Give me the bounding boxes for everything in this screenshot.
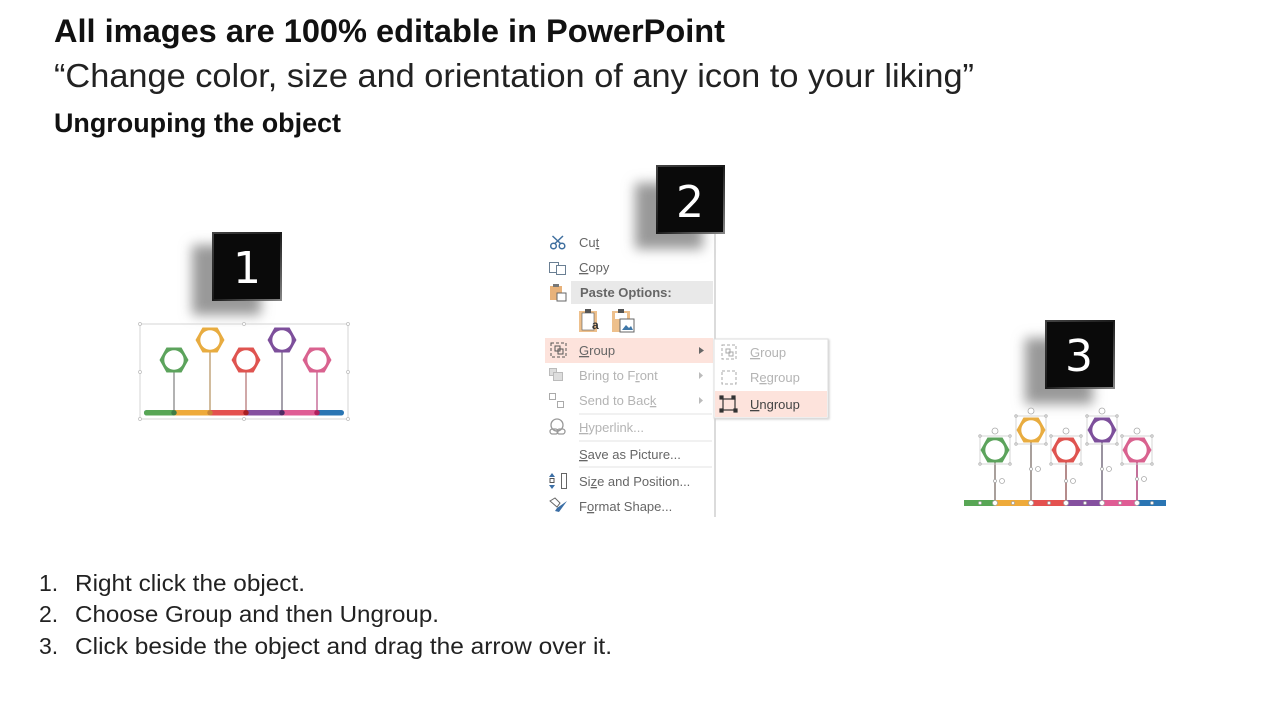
menu item: cut: Cut [579,235,600,250]
menu item: send to back: Send to Back [579,393,657,408]
step 2 badge [635,165,725,249]
icon: format shape [550,498,567,512]
paste options row [571,281,713,304]
highlighted row: group [545,338,713,363]
icon: group [551,343,566,357]
subtitle: “Change color, size and orientation of any icon to your liking” [54,57,974,94]
icon: paste picture [612,309,634,332]
icon: ungroup [720,396,737,412]
step 1 text: 1. [39,570,58,596]
menu item: size and position: Size and Position... [579,474,690,489]
step 2 text: Choose Group and then Ungroup. [75,601,439,627]
step 3 badge: 3 [1065,331,1093,382]
step 2 badge: 2 [676,177,704,228]
menu item: save as picture: Save as Picture... [579,447,681,462]
step 3 badge [1025,320,1115,404]
step 1 text: Right click the object. [75,570,305,596]
menu item: copy: Copy [579,260,610,275]
arrow: group submenu [699,347,704,354]
step 2 text: 2. [39,601,58,627]
step 3 ungrouped timeline graphic [964,408,1166,506]
menu heading: paste options: Paste Options: [580,285,672,300]
menu item: bring to front: Bring to Front [579,368,658,383]
submenu item: group: Group [750,345,786,360]
icon: paste text: a [592,318,599,332]
submenu item: regroup: Regroup [750,370,800,385]
icon: send to back [550,394,564,408]
ungroup submenu [714,339,828,418]
icon: paste [550,284,566,301]
arrow: send to back [699,397,703,404]
icon: scissors [551,236,565,249]
menu item: format shape: Format Shape... [579,499,672,514]
title: All images are 100% editable in PowerPoint [54,13,725,49]
step 1 badge [192,232,282,315]
icon: regroup [722,371,736,384]
icon: copy [550,262,566,274]
menu item: group: Group [579,343,615,358]
step 1 timeline graphic [138,322,350,420]
icon: hyperlink [550,419,565,434]
menu item: hyperlink: Hyperlink... [579,420,644,435]
submenu item: ungroup: Ungroup [750,397,800,412]
icon: paste text [579,309,599,332]
section heading: Ungrouping the object [54,108,341,138]
step 3 text: Click beside the object and drag the arrow over it. [75,633,612,659]
arrow: bring to front [699,372,703,379]
step 2 context menu [545,232,715,517]
icon: submenu group [722,345,736,359]
icon: size and position [549,473,566,489]
highlighted row: ungroup [715,391,827,417]
step 1 badge: 1 [233,243,261,294]
step 3 text: 3. [39,633,58,659]
icon: bring to front [550,368,562,380]
instructions list [39,570,612,659]
